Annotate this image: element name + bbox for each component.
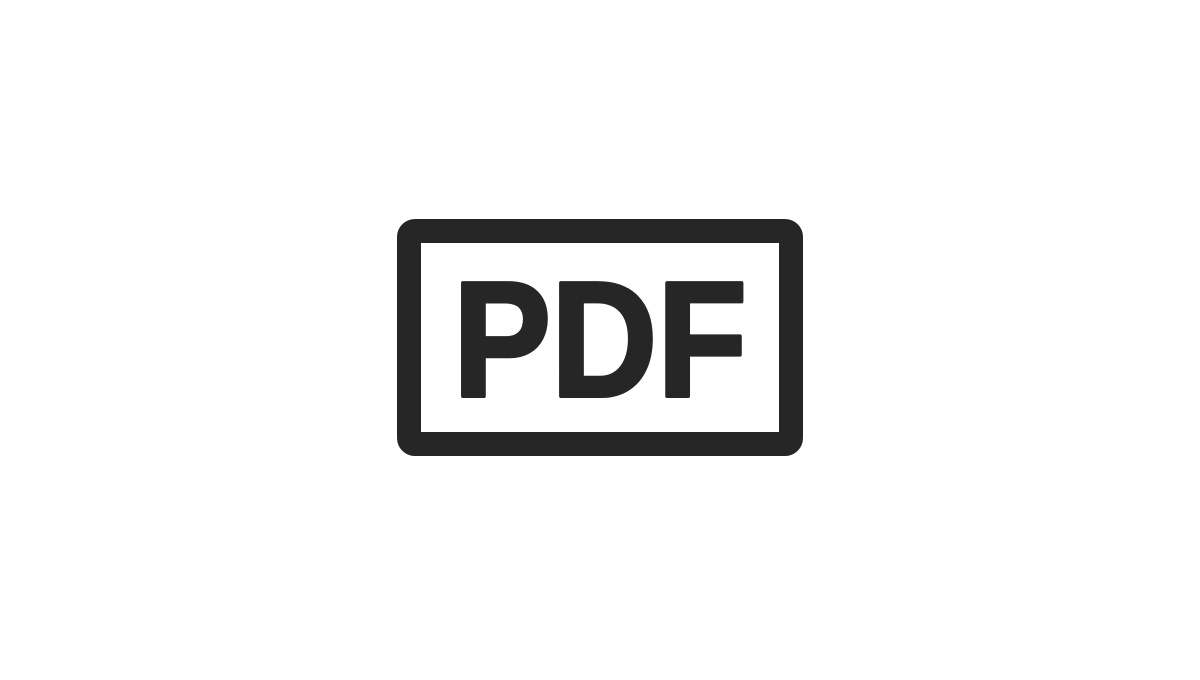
label: PDF text: PDF <box>453 248 747 431</box>
icon frame: rounded rectangle outline <box>409 231 791 444</box>
